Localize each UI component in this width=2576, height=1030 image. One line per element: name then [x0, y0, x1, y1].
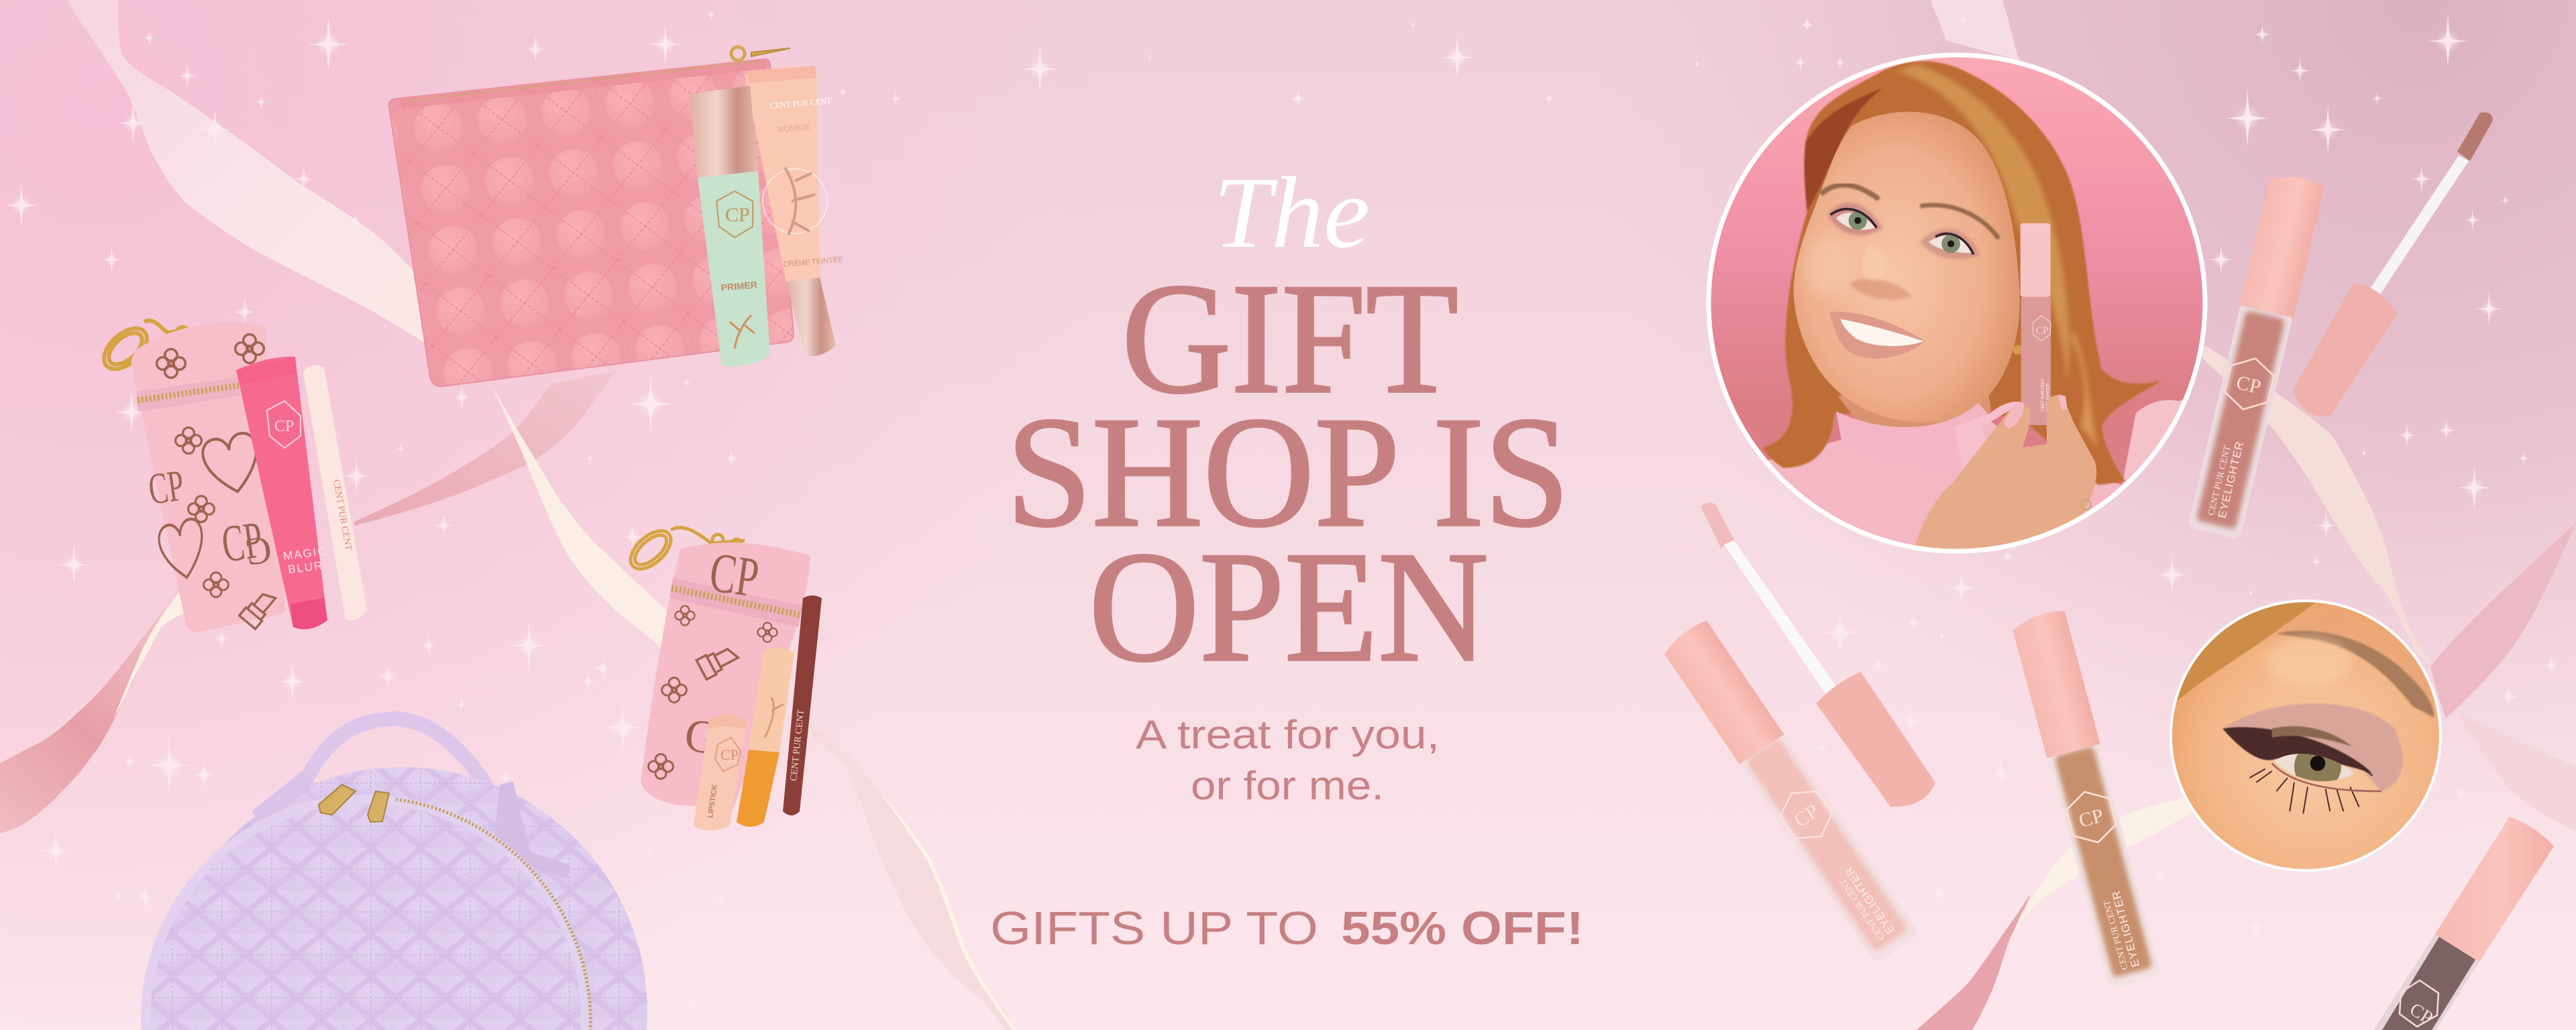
lipgloss tube in hand	[2021, 223, 2051, 425]
cheek highlight	[1804, 235, 1851, 297]
scarf	[1836, 403, 1990, 477]
brown liner: CENT PUR CENT	[789, 709, 806, 781]
lavender quilted bag	[146, 719, 647, 1030]
heading line 2: SHOP IS	[1006, 385, 1570, 560]
lipgloss tube in hand: CENT PUR CENT	[2041, 378, 2045, 412]
heading: GIFT SHOP IS OPEN	[1006, 251, 1570, 695]
ribbon: cream lower-right	[2012, 798, 2192, 934]
strap tabs	[252, 771, 315, 826]
green primer roll-on: PRIMER	[720, 279, 758, 293]
taupe tube logo	[2400, 980, 2438, 1029]
nails	[2004, 394, 2068, 428]
brown liner	[783, 595, 822, 815]
right eye	[1920, 229, 1980, 259]
magic blur tube: BLUR	[287, 559, 324, 576]
offer regular: GIFTS UP TO	[990, 902, 1318, 954]
wand applicator rose	[2457, 113, 2493, 161]
ribbon: cream right flow	[2202, 345, 2430, 663]
right brow	[1920, 205, 1999, 239]
eyelighter set: pale pink, with open wand	[1661, 503, 1935, 964]
monogram motifs	[649, 541, 777, 779]
monogram small case with mini lipstick, gloss and liner	[624, 524, 822, 831]
eyeshadow	[2222, 703, 2402, 791]
peach tinted cream tube	[745, 66, 843, 356]
green primer roll-on	[690, 86, 770, 367]
hand	[1913, 395, 2096, 557]
heading line 3: OPEN	[1089, 520, 1489, 695]
tagline line 1: A treat for you,	[1136, 712, 1440, 757]
closed tube pale: CENT PUR CENT	[1838, 876, 1887, 941]
closed tube rose	[2187, 171, 2325, 540]
closed tube pale: EYELIGHTER	[1842, 864, 1897, 936]
blouse	[1768, 400, 2183, 545]
tagline	[1136, 712, 1440, 808]
ribbon: pink arc centre-left	[354, 371, 616, 526]
green primer roll-on: CP	[725, 204, 750, 226]
zipper pullers	[319, 785, 389, 822]
ribbon: pale wedge far right	[2456, 712, 2576, 832]
eye close-up circle	[2160, 590, 2455, 885]
gusset	[158, 767, 647, 1030]
handle	[303, 719, 493, 797]
monogram pink case with magic blur and pencil	[97, 321, 367, 632]
ring	[2082, 500, 2091, 510]
eyelighter: bronze tube	[2010, 608, 2162, 989]
eyelighter: taupe tube	[2373, 817, 2554, 1030]
magic blur tube	[236, 357, 328, 629]
case zipper	[669, 578, 803, 627]
brow bone shade	[2276, 614, 2442, 716]
offer line	[990, 902, 1584, 954]
zipper puller	[731, 47, 790, 60]
monogram motifs: C	[243, 528, 274, 575]
lipgloss tube in hand: CP	[2036, 325, 2048, 337]
mouth	[1829, 312, 1925, 359]
ribbon: pink bottom-left	[0, 592, 183, 834]
earring	[2013, 345, 2023, 355]
heading line 1: GIFT	[1122, 251, 1458, 426]
peach tinted cream tube: NOMIGE	[777, 122, 811, 134]
hair	[1763, 61, 2161, 485]
portrait circle	[1705, 50, 2211, 557]
portrait background	[1711, 58, 2203, 485]
wand applicator pale	[1701, 503, 1734, 548]
closed tube rose: CENT PUR CENT	[2206, 444, 2233, 517]
case body	[131, 323, 285, 632]
closed tube rose: CP	[2234, 371, 2263, 398]
pouch zipper	[397, 59, 767, 109]
closed tube rose: EYELIGHTER	[2216, 440, 2246, 520]
magic blur tube: CP	[274, 418, 294, 435]
peach tinted cream tube: CRÈME TEINTÉE	[783, 255, 843, 269]
ribbon: thin cream middle	[490, 384, 711, 671]
taupe tube body	[2373, 934, 2479, 1030]
ribbon: cream sliver bottom-left	[114, 592, 184, 718]
peach gloss tube	[737, 647, 794, 827]
mini lipstick: CP	[720, 746, 739, 763]
eyelighter: bronze tube: EYELIGHTER	[2109, 889, 2142, 968]
left brow	[1821, 185, 1879, 199]
front panel	[148, 801, 584, 1030]
eyeliner	[2222, 727, 2373, 773]
eyelighter: bronze tube: CENT PUR CENT	[2102, 899, 2131, 971]
eyelighter: bronze tube: CP	[2076, 804, 2106, 832]
ribbon: pink right wedge	[2430, 523, 2576, 718]
highlight	[2265, 637, 2350, 686]
offer bold: 55% OFF!	[1341, 902, 1584, 954]
closed tube pale: CP	[1790, 800, 1823, 832]
case zipper	[136, 377, 240, 412]
title: The: The	[1214, 156, 1370, 269]
case body	[641, 542, 810, 809]
eyeball	[2274, 754, 2355, 781]
closed tube pale	[1661, 618, 1920, 964]
peach tinted cream tube: CENT PUR CENT	[769, 96, 832, 111]
keyring	[624, 524, 745, 576]
monogram motifs: CP	[706, 541, 763, 610]
lash lines	[2249, 764, 2373, 813]
skin	[2160, 590, 2455, 885]
pouch body	[389, 59, 794, 386]
monogram motifs: CP	[146, 461, 187, 514]
neck	[1838, 395, 1991, 427]
magic blur tube: MAGIC	[282, 545, 328, 563]
hair strand	[2160, 590, 2316, 704]
monogram motifs: G	[682, 709, 722, 765]
tagline line 2: or for me.	[1191, 763, 1384, 808]
wand cap rose	[2292, 283, 2398, 416]
ribbon: pale lower-centre	[805, 716, 1017, 1030]
ribbon: cream top-right	[1931, 0, 2019, 60]
pink quilted pouch with primer and tinted cream	[389, 47, 843, 386]
ribbon: pink lower-right	[1917, 894, 2031, 1030]
lipgloss tube in hand: EYELIGHTER	[2046, 383, 2051, 412]
monogram motifs	[146, 335, 279, 629]
eyebrow	[2276, 631, 2434, 718]
wand cap pale	[1816, 672, 1935, 807]
keyring	[97, 321, 201, 377]
face	[1793, 112, 2020, 422]
left eye	[1827, 203, 1882, 235]
ribbon: cream swirl top-left	[67, 0, 429, 345]
mini lipstick	[694, 714, 747, 831]
nose	[1850, 242, 1911, 300]
taupe tube cap	[2435, 817, 2554, 962]
monogram motifs: CP	[218, 510, 266, 573]
taupe tube logo: CP	[2406, 999, 2436, 1029]
cream pencil	[303, 365, 367, 620]
mini lipstick: LIPSTICK	[706, 784, 719, 818]
zipper	[396, 799, 590, 1030]
eyelighter set: rose, with open wand	[2187, 113, 2493, 540]
hair highlights	[1896, 64, 2098, 447]
cream pencil: CENT PUR CENT	[331, 479, 354, 552]
